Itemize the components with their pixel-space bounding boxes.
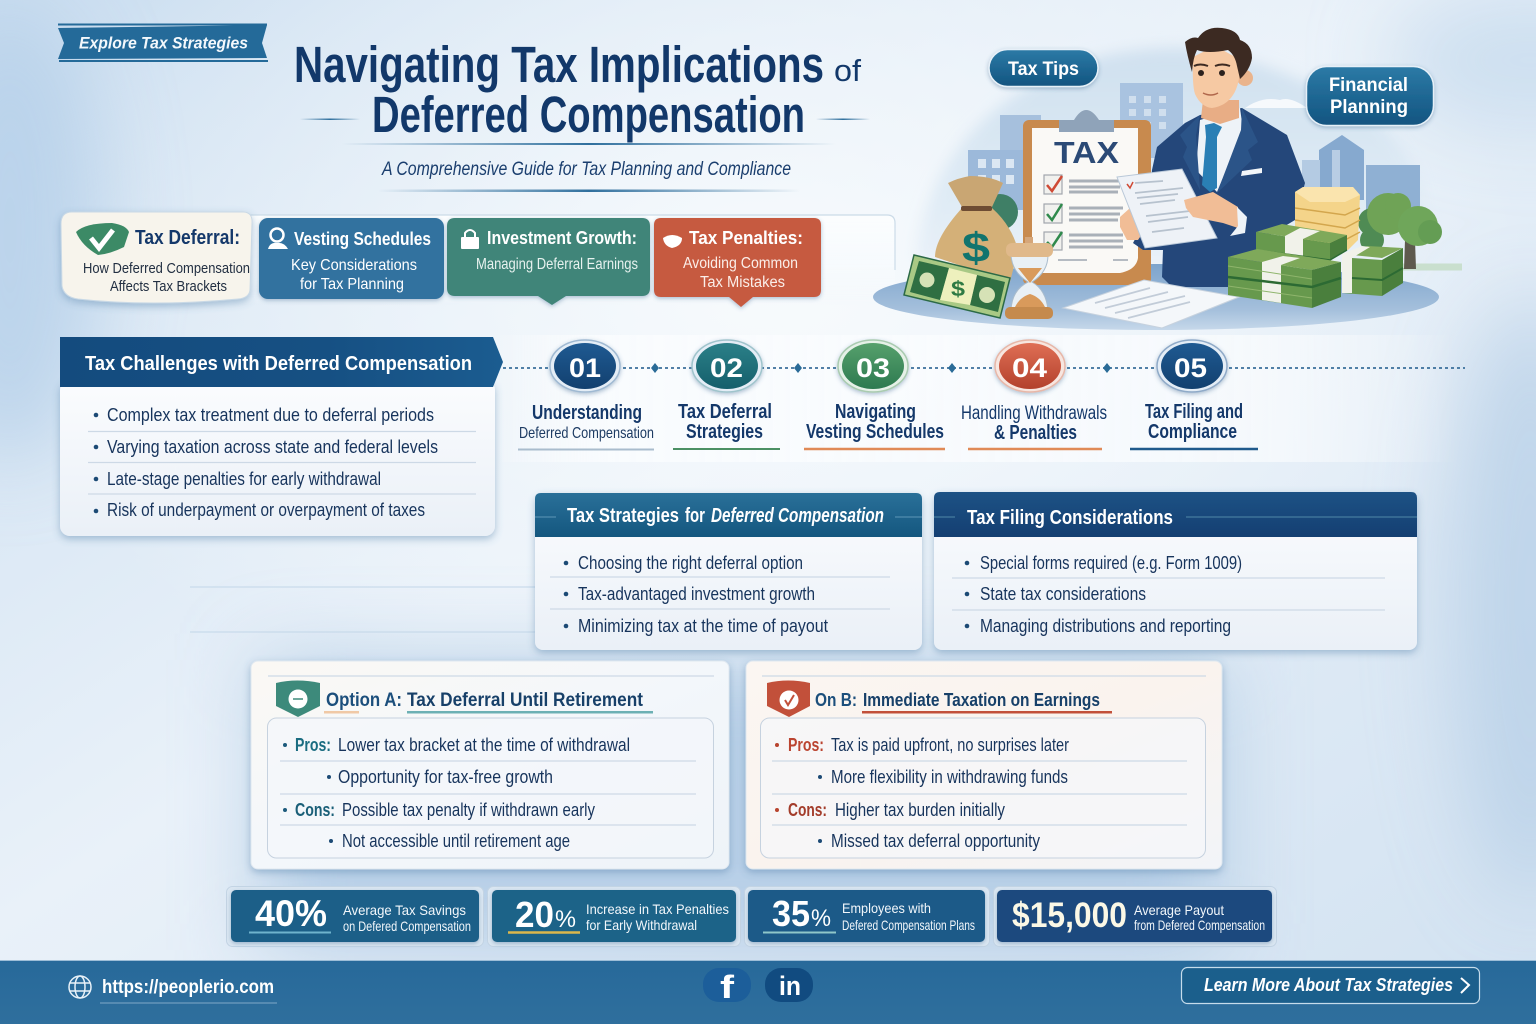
step 02: Tax Deferral [678,401,772,423]
bullet list [550,552,890,636]
tab: Vesting Schedules: for Tax Planning [300,276,404,293]
pros and cons: Higher tax burden initially [835,799,1006,820]
header: for [685,505,705,527]
tab: Tax Deferral: Affects Tax Brackets [110,278,227,295]
step 04: & Penalties [994,422,1077,444]
title: Deferred Compensation [372,86,805,143]
icon: green shield check [76,223,129,255]
icon: money bag [935,176,1018,282]
panel: option B [746,661,1222,869]
icon: red shield [767,680,810,717]
city backdrop [915,48,1425,262]
stat: 40% [226,886,484,946]
bullet list [88,404,476,520]
step 04: 04 [1012,353,1047,383]
bullet list: State tax considerations [980,583,1146,604]
header: Deferred Compensation [711,505,884,527]
subtitle: A Comprehensive Guide for Tax Planning and Compliance [381,159,791,180]
icon: facebook [703,968,751,1005]
illustration: tax advisor scene [873,28,1462,330]
pill: Tax Tips [989,50,1098,86]
stat: 20%: % [555,906,576,933]
pros and cons: Pros: [295,735,331,755]
suit [1133,108,1305,287]
pros and cons: Missed tax deferral opportunity [831,830,1041,851]
tab: Tax Deferral: Tax Deferral: [135,227,240,249]
step 05: Compliance [1148,421,1237,443]
process timeline [503,340,1465,450]
tab: Tax Penalties: Tax Penalties: [689,227,803,248]
step 04 [961,340,1107,449]
title: Navigating Tax Implications [294,36,824,93]
step 05: Tax Filing and [1145,401,1243,423]
stat: $15,000 [994,886,1276,946]
bullet list: Managing distributions and reporting [980,615,1231,636]
tab: Investment Growth: Investment Growth: [487,228,637,248]
step 03: Navigating [835,401,916,423]
step 03: 03 [856,353,890,383]
step 01 [518,340,654,450]
step 04: Handling Withdrawals [961,403,1107,424]
ground ellipse [873,264,1462,330]
pros and cons: Tax is paid upfront, no surprises later [831,734,1069,755]
tab: Tax Deferral [61,212,252,303]
icon: money bag: $ [962,224,990,271]
stat: $15,000: Average Payout [1134,902,1224,918]
step 05 [1130,340,1258,449]
stat: 20% [488,886,740,946]
pros and cons: Cons: [788,800,827,820]
icon: teal shield [276,680,320,717]
stat: $15,000: $15,000 [1012,896,1127,935]
step 01: Understanding [532,402,642,424]
tab: Vesting Schedules: Key Considerations [291,257,417,274]
step 01: 01 [569,353,601,383]
pros and cons: Pros: [788,735,824,755]
pill: Tax Tips: Tax Tips [1008,59,1079,80]
tab: Investment Growth [447,218,650,305]
bullet list: Varying taxation across state and federal levels [107,436,438,457]
heading [815,690,1112,714]
bullet list: Special forms required (e.g. Form 1009) [980,552,1242,573]
panel: tax filing considerations [934,492,1417,650]
icon: hourglass [1005,237,1053,319]
panel: option A [251,661,729,869]
bullet list: Complex tax treatment due to deferral periods [107,404,434,425]
bullet list [952,552,1385,636]
panel: tax challenges [60,337,503,536]
stat: 35%: 35 [772,893,810,934]
pros and cons [280,734,696,851]
heading: Tax Deferral Until Retirement [407,690,644,711]
tab: Tax Penalties [654,218,821,307]
icon: coin stack [1295,187,1360,250]
bullet list: Choosing the right deferral option [578,552,803,573]
tab: Investment Growth: Managing Deferral Earnings [476,256,638,273]
bullet list: Late-stage penalties for early withdrawal [107,468,381,489]
step 02: Strategies [686,421,763,443]
icon: person [268,228,288,249]
heading [324,690,653,714]
bullet list: Minimizing tax at the time of payout [578,615,828,636]
heading: Option A: [326,690,402,711]
step 01: Deferred Compensation [519,425,654,442]
icon: clipboard with TAX checklist: TAX [1054,135,1119,170]
shirt and tie [1180,108,1262,193]
icon: loose documents [1063,280,1239,328]
pill: Financial Planning: Planning [1330,97,1408,118]
stat: 40%: 40% [255,893,327,934]
pros and cons: Possible tax penalty if withdrawn early [342,799,596,820]
pros and cons [772,734,1187,851]
icon: clipboard with TAX checklist [1023,110,1151,285]
icon: linkedin: in [779,971,801,1001]
stat: 35%: Defered Compensation Plans [842,917,975,933]
title: of [834,53,861,88]
icon: lock [461,230,479,249]
icon: globe [69,976,91,998]
button: learn more [1182,968,1480,1004]
step 03: Vesting Schedules [806,421,944,443]
title [294,36,870,145]
pros and cons: Cons: [295,800,335,820]
icon: pin [663,235,682,248]
icon: tree [1358,193,1442,269]
header [934,492,1417,537]
tab: Vesting Schedules: Vesting Schedules [294,228,431,249]
panel: tax strategies [535,493,922,650]
header ribbon [60,337,503,387]
stat: 20%: Increase in Tax Penalties [586,901,729,917]
tab: Vesting Schedules [259,218,444,299]
header ribbon: Tax Challenges with Deferred Compensation [85,353,472,375]
header: Tax Filing Considerations [967,507,1173,529]
icon: cash stacks [1228,224,1403,308]
illustration: advisor [1117,28,1305,287]
step 03 [804,340,945,449]
tab: Tax Penalties: Avoiding Common [683,255,798,272]
button: learn more: Learn More About Tax Strategies [1204,975,1453,995]
website link: https://peoplerio.com [102,977,274,998]
icon: linkedin [765,968,813,1002]
bullet list: Tax-advantaged investment growth [578,583,815,604]
stat: 20%: for Early Withdrawal [586,917,697,933]
heading: Immediate Taxation on Earnings [863,690,1100,710]
icon: facebook: f [720,969,734,1005]
panel: concept tabs [61,212,895,307]
stat: 20%: 20 [515,894,554,935]
stat: 40%: Average Tax Savings [343,902,466,918]
tab: Tax Deferral: How Deferred Compensation [83,260,250,277]
tab: Tax Penalties: Tax Mistakes [700,274,785,291]
icon: dollar bill [904,255,1010,318]
pill: Financial Planning [1306,66,1434,126]
step 02 [673,340,780,449]
icon: dollar bill: $ [951,278,965,301]
step 02: 02 [710,353,743,383]
footer bar [0,960,1536,1024]
pill: Financial Planning: Financial [1329,75,1408,96]
head [1185,28,1253,124]
heading: On B: [815,690,857,710]
header: Tax Strategies [567,505,679,527]
pros and cons: Lower tax bracket at the time of withdrawal [338,734,630,755]
bullet list: Risk of underpayment or overpayment of taxes [107,499,425,520]
pros and cons: More flexibility in withdrawing funds [831,766,1068,787]
step 05: 05 [1174,353,1207,383]
stat: 35%: % [811,905,831,932]
pros and cons: Not accessible until retirement age [342,830,570,851]
banner: Explore Tax Strategies: Explore Tax Strategies [79,34,248,52]
stat: $15,000: from Defered Compensation [1134,917,1265,933]
stat: 35%: Employees with [842,900,931,916]
timeline backing panel [500,335,1460,462]
pros and cons: Opportunity for tax-free growth [338,766,553,787]
stat: 40%: on Defered Compensation [343,918,471,934]
header [535,493,922,537]
stat: 35% [744,886,990,946]
banner: Explore Tax Strategies [58,24,268,61]
held paper and hands [1117,169,1247,248]
